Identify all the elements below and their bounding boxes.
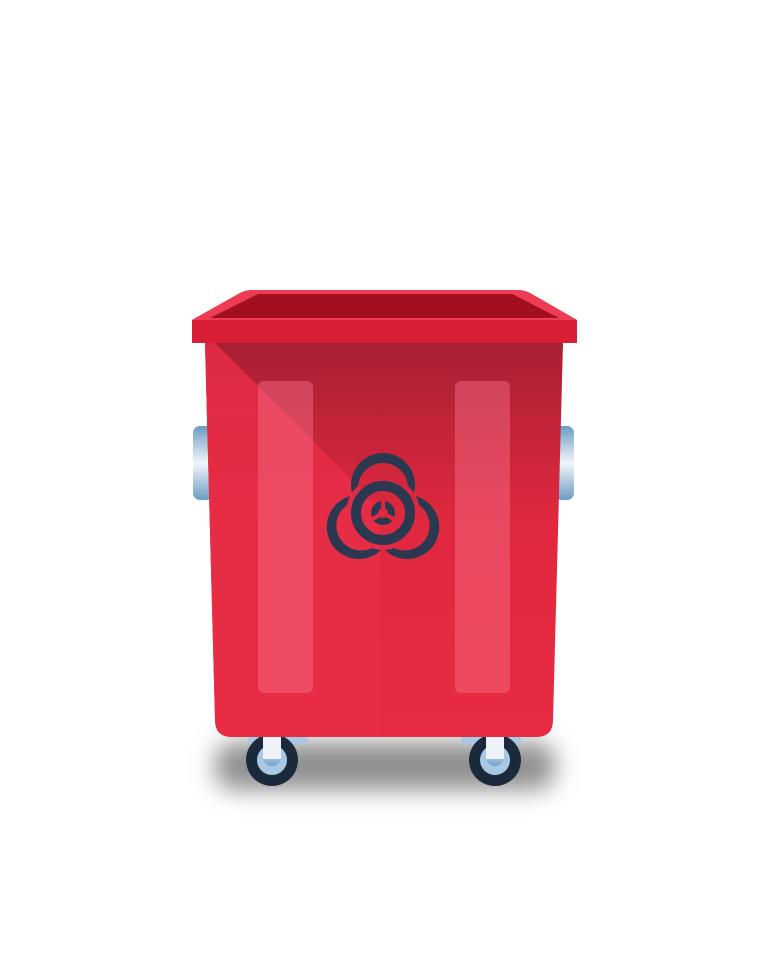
panel: right [455,381,510,693]
wheel: right [461,734,521,786]
handle: right [555,426,574,500]
wheel: left [246,734,308,786]
lid [192,290,577,343]
shadow [215,742,555,790]
icon: biohazard symbol [326,453,440,559]
bin body [200,340,570,740]
panel: left [258,381,313,693]
handle: left [193,426,213,500]
illustration: biohazard waste bin [192,290,577,806]
